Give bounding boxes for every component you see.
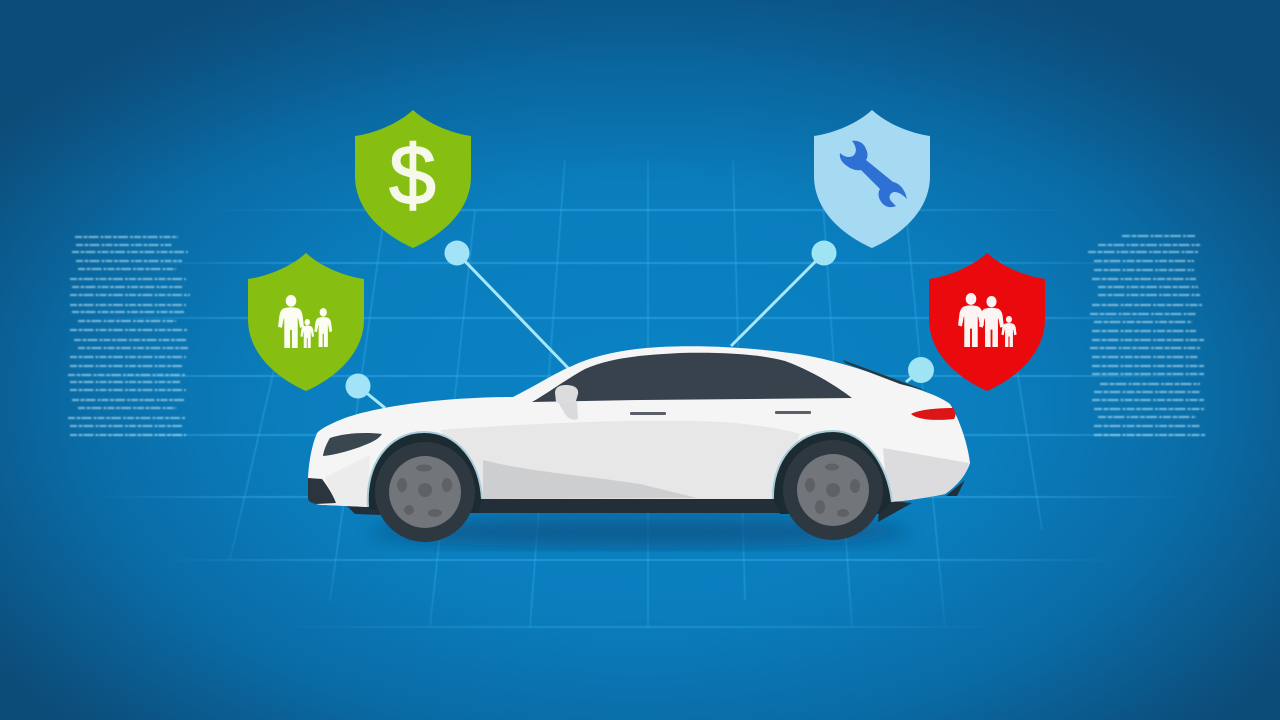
vertical grid <box>230 160 1042 627</box>
car sill shade <box>483 460 697 499</box>
car lower shade <box>440 421 800 499</box>
door handle rear <box>775 411 811 414</box>
car rear spoiler line <box>843 360 927 391</box>
front wheel <box>375 442 475 542</box>
car mirror <box>555 385 578 420</box>
icon: dollar sign: $ <box>389 128 436 222</box>
rear wheel arch <box>773 431 892 514</box>
front wheel arch <box>368 432 482 513</box>
car front grille <box>308 478 336 504</box>
shield: repair <box>814 110 930 248</box>
rear wheel <box>783 440 883 540</box>
door handle front <box>630 412 666 415</box>
car side window <box>532 353 852 402</box>
text block: left (illegible small copy) <box>68 237 190 435</box>
icon: wrench <box>840 141 907 207</box>
connector: red family shield to trunk <box>906 357 934 383</box>
connector: dollar shield to roof <box>444 240 570 370</box>
car headlight <box>323 433 382 456</box>
shield: money <box>355 110 471 248</box>
car front lower panel <box>322 455 370 507</box>
car shadow <box>370 516 910 548</box>
horizontal grid <box>60 210 1220 627</box>
car body <box>308 346 970 507</box>
connector: green family shield to hood <box>346 374 385 408</box>
car underbody <box>346 480 965 522</box>
shield: family red <box>929 253 1045 391</box>
car rear shade <box>883 448 969 502</box>
car <box>308 346 970 542</box>
text block: right (illegible small copy) <box>1088 236 1205 435</box>
icon: family white <box>958 293 1017 347</box>
icon: family white <box>278 295 332 348</box>
shield: family green <box>248 253 364 391</box>
connector: wrench shield to roof <box>731 240 836 346</box>
tail light <box>911 408 955 420</box>
